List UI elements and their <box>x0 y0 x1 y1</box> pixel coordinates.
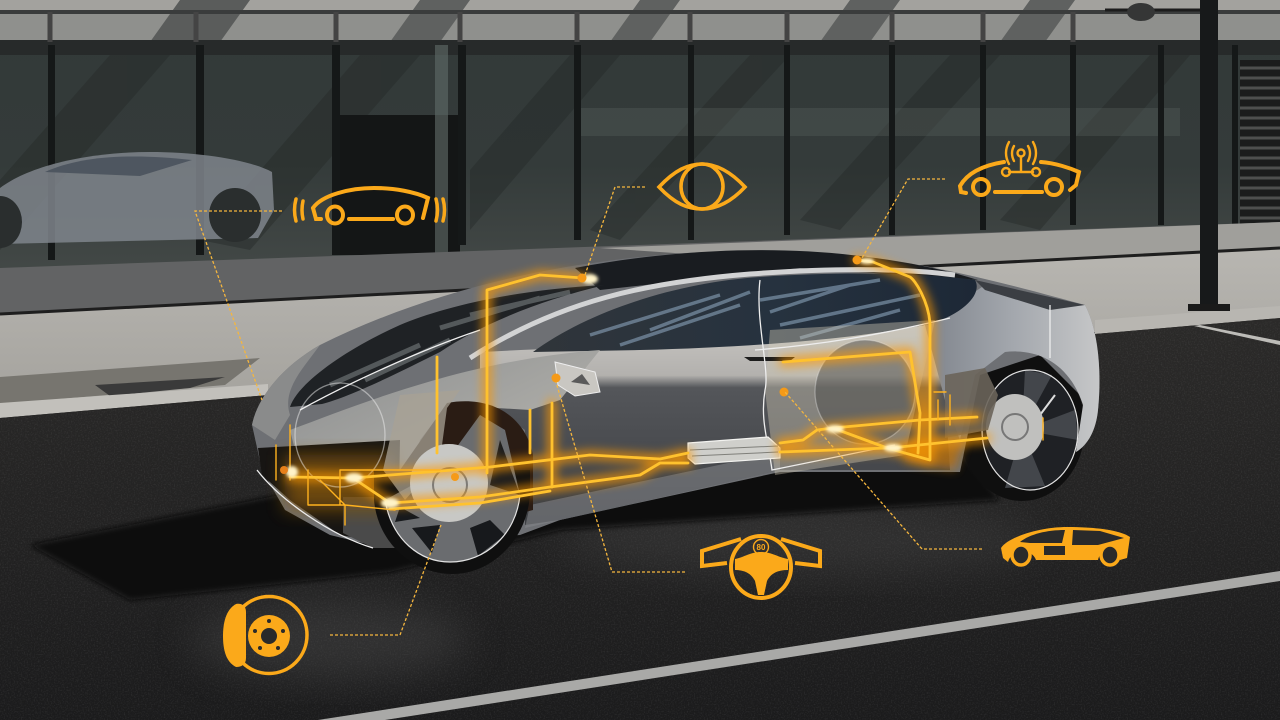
white wireframe lines <box>257 280 1050 548</box>
car body <box>252 251 1099 546</box>
front rim <box>385 415 520 562</box>
side glass <box>533 274 977 352</box>
front harness detail <box>276 392 1043 525</box>
front bumper <box>258 440 400 545</box>
reflective ground band <box>0 222 1280 315</box>
icon: car with highlighted body <box>1001 527 1130 565</box>
louvre wall <box>1240 60 1280 242</box>
rear tyre <box>959 353 1085 501</box>
rear suspension <box>945 368 998 438</box>
hood edge <box>252 345 320 440</box>
icon: car with distance sensing waves <box>294 188 444 224</box>
front fender <box>290 350 600 500</box>
door and sill <box>480 320 950 525</box>
front wheel arch <box>400 401 533 545</box>
curb <box>0 384 268 418</box>
mullions <box>48 45 1238 260</box>
rear disc <box>986 394 1044 460</box>
building facade <box>0 0 1280 300</box>
front tyre <box>374 470 530 574</box>
rear rim <box>982 370 1078 490</box>
front disc <box>410 444 488 522</box>
roof <box>575 250 978 290</box>
icon: connected car with antenna <box>960 142 1079 195</box>
windshield <box>290 285 605 407</box>
callout leader lines <box>195 179 982 635</box>
outer glow <box>290 260 987 503</box>
icon: steering wheel with speed sign <box>702 536 820 598</box>
rear door ghost panel <box>765 320 935 475</box>
road surface <box>0 318 1280 720</box>
reflected car <box>0 152 274 248</box>
glowing wiring harness <box>276 260 1043 525</box>
door handle <box>744 357 795 361</box>
bright core <box>290 260 987 509</box>
ceiling soffit <box>0 0 1280 55</box>
sidewalk <box>0 247 1280 415</box>
sill highlight <box>525 452 780 528</box>
rear quarter <box>925 285 1099 452</box>
icon: eye <box>659 164 745 209</box>
icon: brake disc <box>223 596 307 674</box>
silver roof rail <box>470 270 955 358</box>
front mirror <box>555 362 600 396</box>
battery pack <box>688 437 780 464</box>
road marking <box>318 571 1280 720</box>
hot spots <box>280 256 902 508</box>
car <box>252 250 1099 574</box>
car shadow <box>30 450 1000 600</box>
front fender ghost <box>383 390 460 500</box>
icon: steering wheel with speed sign: 80 <box>757 543 766 552</box>
glass reflections <box>0 55 1190 250</box>
lamp post <box>1105 0 1230 311</box>
